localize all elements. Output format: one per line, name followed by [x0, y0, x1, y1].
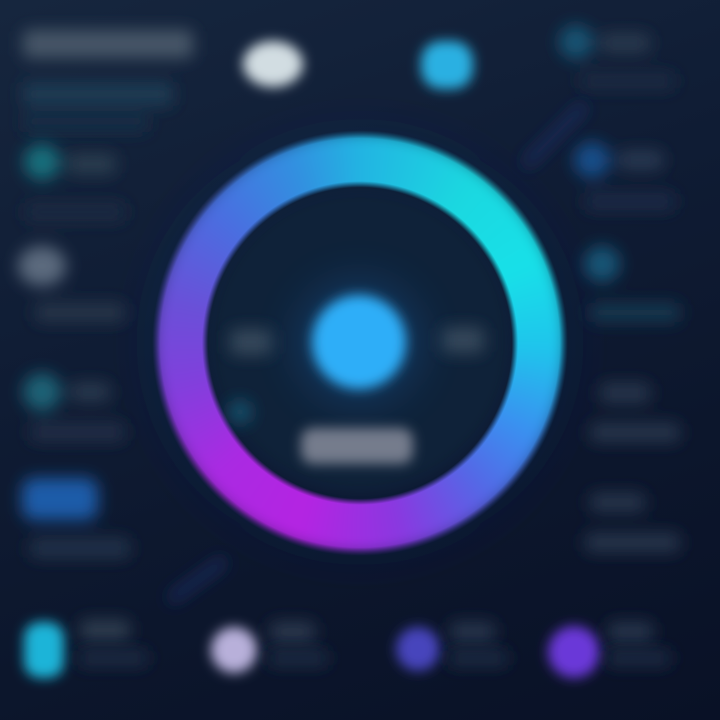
- centre side labels: [228, 327, 484, 424]
- centre disc: [312, 295, 406, 389]
- top cyan icon: [421, 41, 473, 89]
- left column items: [18, 144, 130, 558]
- centre glow: [299, 282, 419, 402]
- gradient ring: [152, 130, 568, 556]
- faint diagonal connectors: [170, 105, 585, 600]
- ring inner disc: [204, 184, 516, 496]
- top pill icon: [243, 41, 303, 87]
- bottom legend: [24, 620, 671, 678]
- right column items: [559, 25, 680, 552]
- heading block: [23, 30, 193, 132]
- centre value label: [301, 428, 413, 464]
- ring glow: [165, 147, 555, 537]
